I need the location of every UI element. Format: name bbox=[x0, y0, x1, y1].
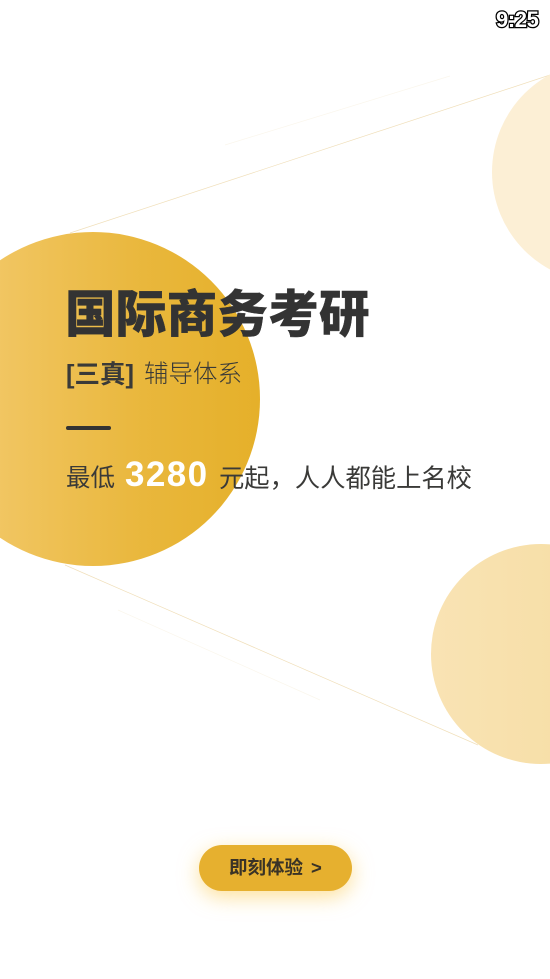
call to action button bbox=[199, 845, 352, 891]
title: 国际商务考研 bbox=[65, 286, 370, 343]
label: tagline: 元起，人人都能上名校 bbox=[219, 465, 472, 493]
price line bbox=[66, 455, 472, 494]
subtitle bbox=[66, 361, 242, 389]
subtitle light part: 辅导体系 bbox=[144, 361, 242, 388]
button arrow: > bbox=[311, 857, 322, 878]
subtitle bold part: [三真] bbox=[66, 361, 134, 389]
label: lowest: 最低 bbox=[66, 465, 115, 492]
button label: 即刻体验 bbox=[229, 857, 303, 878]
divider bar bbox=[66, 426, 111, 430]
status bar time: 9:25 bbox=[496, 7, 538, 32]
price number: 3280 bbox=[125, 455, 208, 494]
